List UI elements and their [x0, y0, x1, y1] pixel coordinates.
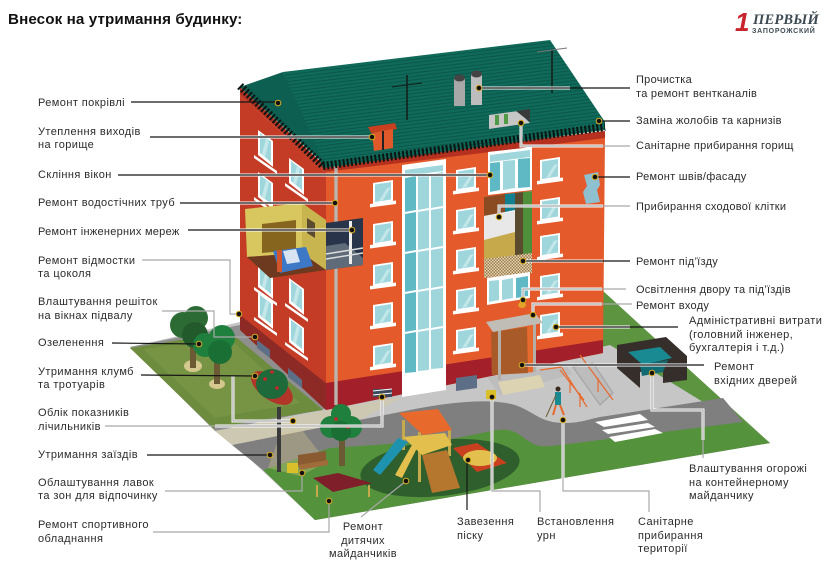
callout: Ремонт інженерних мереж: Ремонт інженерних мереж [38, 226, 180, 238]
callout: Ремонт дитячих майданчиків: дитячих [341, 535, 385, 547]
callout: Утримання клумб та тротуарів: Утримання клумб [38, 366, 134, 378]
glass stairwell column [402, 159, 446, 397]
callout: Ремонт покрівлі [38, 97, 281, 109]
entrance trash bin [486, 390, 496, 399]
callout: Санітарне прибирання горищ [518, 120, 794, 152]
callout: Санітарне прибирання території [560, 417, 703, 555]
callout: Завезення піску: Завезення [457, 516, 514, 528]
bench [298, 451, 328, 470]
callout: Ремонт водостічних труб [38, 197, 338, 209]
callout: Прочистка та ремонт вентканалів: Прочистка [636, 74, 693, 86]
callout: Озеленення [38, 337, 202, 349]
lower large window [487, 272, 530, 305]
callout: Озеленення: Озеленення [38, 337, 104, 349]
callout: Ремонт водостічних труб: Ремонт водостічних труб [38, 197, 175, 209]
logo: 1 [735, 7, 749, 37]
callout: Адміністративні витрати: (головний інженер, [689, 329, 793, 341]
callout: Прочистка та ремонт вентканалів [476, 74, 757, 100]
callout: Встановлення урн [489, 394, 614, 542]
callout: Ремонт спортивного обладнання [38, 498, 332, 545]
large window upper [488, 147, 532, 195]
callout: Ремонт під'їзду [520, 256, 718, 268]
trees on lawn [170, 306, 235, 389]
callout: Облаштування лавок та зон для відпочинку [38, 470, 305, 502]
ramp and railings [540, 355, 613, 407]
cleaner figure [546, 386, 564, 417]
callout: Влаштування огорожі на контейнерному майданчику: на контейнерному [689, 477, 789, 489]
service shaft cutaway [326, 218, 363, 270]
callout: Влаштування огорожі на контейнерному майданчику: Влаштування огорожі [689, 463, 807, 475]
callout: Ремонт покрівлі: Ремонт покрівлі [38, 97, 125, 109]
logo: ПЕРВЫЙ [752, 10, 820, 28]
callout: Прочистка та ремонт вентканалів: та ремонт вентканалів [636, 88, 757, 100]
callout: Ремонт спортивного обладнання: обладнання [38, 533, 103, 545]
callout: Утримання заїздів: Утримання заїздів [38, 449, 138, 461]
apartment cutaway [245, 203, 326, 278]
logo: ЗАПОРОЖСКИЙ [752, 26, 816, 35]
callout: Завезення піску [457, 457, 514, 542]
drain pipe [334, 166, 338, 405]
street lamp [268, 407, 327, 476]
callout: Ремонт вхідних дверей: Ремонт [714, 361, 754, 373]
callout: Завезення піску: піску [457, 530, 484, 542]
callout: Ремонт входу [530, 300, 709, 318]
callout: Ремонт інженерних мереж [38, 226, 355, 238]
callout: Ремонт входу: Ремонт входу [636, 300, 709, 312]
callout: Санітарне прибирання території: прибирання [638, 530, 703, 542]
callout: Ремонт відмостки та цоколя: та цоколя [38, 268, 91, 280]
flower bed [245, 364, 299, 412]
crosswalk [595, 414, 663, 442]
callout: Адміністративні витрати [553, 315, 822, 354]
logo [735, 7, 820, 37]
roof dormer [368, 123, 397, 151]
callout: Адміністративні витрати: Адміністративні витрати [689, 315, 822, 327]
hatched entrance area [484, 253, 532, 278]
callout: Облаштування лавок та зон для відпочинку: Облаштування лавок [38, 477, 154, 489]
ground [130, 290, 770, 520]
callout: Ремонт швів/фасаду: Ремонт швів/фасаду [636, 171, 747, 183]
callout: Ремонт вхідних дверей [519, 361, 798, 387]
trash bin by bench [287, 463, 298, 473]
callout: Ремонт під'їзду: Ремонт під’їзду [636, 256, 718, 268]
callout: Влаштування решіток на вікнах підвалу: на вікнах підвалу [38, 310, 133, 322]
callout: Облік показників лічильників [38, 394, 385, 433]
chimneys [454, 70, 482, 106]
callout: Влаштування огорожі на контейнерному майданчику: майданчику [689, 490, 754, 502]
callout: Утримання клумб та тротуарів: та тротуарів [38, 379, 105, 391]
callout: Облік показників лічильників: Облік показників [38, 407, 129, 419]
callout: Санітарне прибирання території: Санітарне [638, 516, 694, 528]
callout: Ремонт дитячих майданчиків [329, 478, 409, 560]
callout: Встановлення урн: урн [537, 530, 556, 542]
building walls [240, 87, 605, 410]
tree near road [320, 404, 362, 466]
callout: Встановлення урн: Встановлення [537, 516, 614, 528]
callout: Санітарне прибирання території: території [638, 543, 688, 555]
stair cutaway [484, 191, 532, 262]
side windows [254, 130, 308, 361]
callout: Освітлення двору та під'їздів [520, 284, 791, 303]
callout: Утеплення виходів на горище: Утеплення виходів [38, 126, 141, 138]
sandbox [453, 443, 507, 472]
meter [373, 389, 392, 397]
callout: Освітлення двору та під'їздів: Освітлення двору та під’їздів [636, 284, 791, 296]
facade patch [583, 172, 600, 204]
callout: Влаштування решіток на вікнах підвалу: Влаштування решіток [38, 296, 158, 308]
callout: Утеплення виходів на горище [38, 126, 375, 151]
title: Внесок на утримання будинку: [8, 11, 242, 28]
callout: Прибирання сходової клітки: Прибирання сходової клітки [636, 201, 786, 213]
callout: Облаштування лавок та зон для відпочинку: та зон для відпочинку [38, 490, 158, 502]
container site [617, 337, 687, 388]
callout: Ремонт відмостки та цоколя [38, 255, 242, 317]
callout: Санітарне прибирання горищ: Санітарне прибирання горищ [636, 140, 794, 152]
callout: Утеплення виходів на горище: на горище [38, 139, 94, 151]
playground [373, 409, 460, 493]
callout: Ремонт спортивного обладнання: Ремонт спортивного [38, 519, 149, 531]
callout: Скління вікон [38, 169, 493, 181]
callout: Ремонт відмостки та цоколя: Ремонт відмостки [38, 255, 135, 267]
callout: Адміністративні витрати: бухгалтерія і т.д.) [689, 342, 784, 354]
callout: Облік показників лічильників: лічильників [38, 421, 101, 433]
front windows [370, 157, 563, 370]
callout: Утримання заїздів [38, 449, 273, 461]
callout: Влаштування решіток на вікнах підвалу [38, 296, 258, 340]
callout: Ремонт дитячих майданчиків: Ремонт [343, 521, 383, 533]
callout: Скління вікон: Скління вікон [38, 169, 112, 181]
attic hatch [489, 109, 530, 129]
callout: Заміна жолобів та карнизів: Заміна жолобів та карнизів [636, 115, 782, 127]
callout: Прибирання сходової клітки [496, 201, 786, 220]
callout: Ремонт дитячих майданчиків: майданчиків [329, 548, 397, 560]
porch [486, 302, 572, 395]
callout: Ремонт вхідних дверей: вхідних дверей [714, 375, 798, 387]
ping-pong table [313, 473, 372, 497]
roof [240, 40, 605, 168]
antennas [392, 48, 567, 120]
callout: Утримання клумб та тротуарів [38, 366, 296, 424]
callout: Влаштування огорожі на контейнерному майданчику [649, 370, 807, 502]
basement grilles [257, 340, 477, 391]
